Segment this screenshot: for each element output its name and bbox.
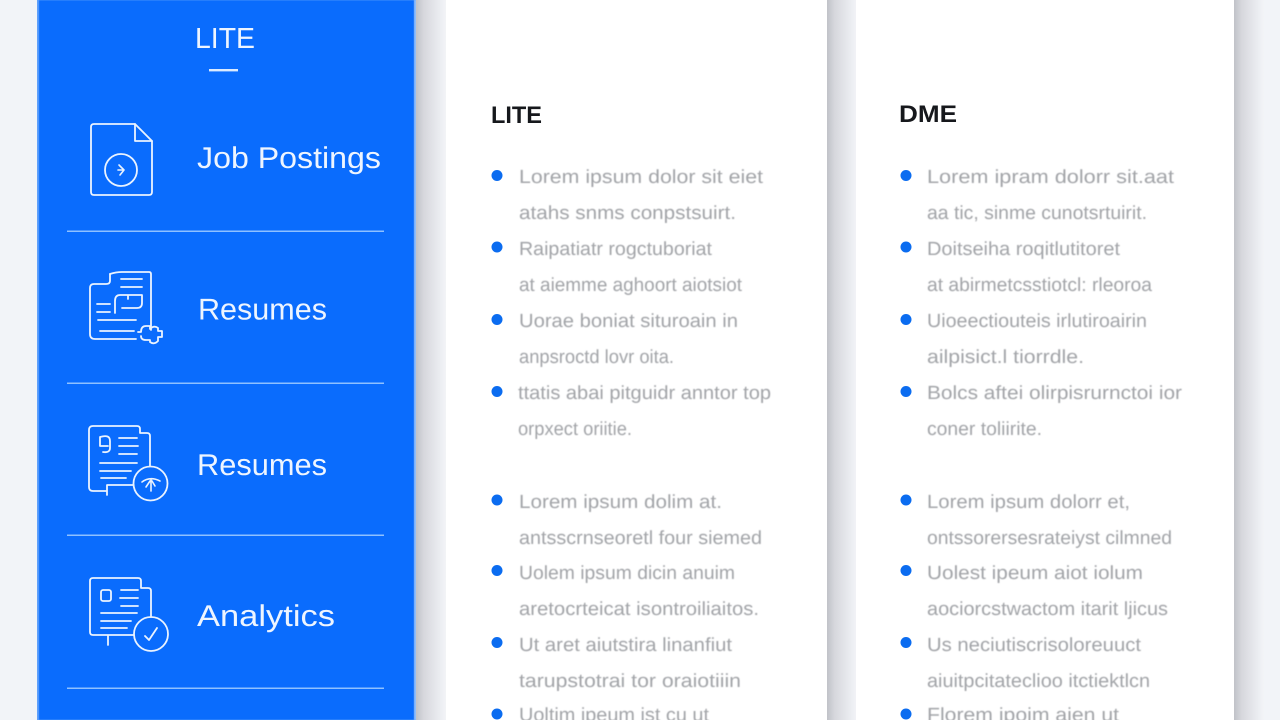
bullet 6: Uolem ipsum dicin anuim <box>519 563 735 584</box>
label: Analytics: Analytics <box>197 600 335 633</box>
bullet 3: Uioeectiouteis irlutiroairin <box>927 311 1147 332</box>
bullet 3 <box>900 311 1147 368</box>
icon: report with check badge <box>90 578 168 651</box>
divider 1 <box>67 230 384 232</box>
bullet 4: ttatis abai pitguidr anntor top <box>518 383 771 404</box>
bullet 7 <box>900 635 1150 692</box>
bullet 5: antsscrnseoretl four siemed <box>519 528 762 549</box>
divider 3 <box>67 534 384 536</box>
bullet 6: aociorcstwactom itarit ljicus <box>927 599 1168 620</box>
bullet 7: Us neciutiscrisoloreuuct <box>927 635 1142 656</box>
bullet 4 <box>492 383 771 440</box>
bullet 1: aa tic, sinme cunotsrtuirit. <box>927 203 1147 224</box>
bullet 1: atahs snms conpstsuirt. <box>519 203 736 224</box>
icon: document with circle <box>91 124 152 195</box>
icon: resume with palm badge <box>89 426 168 500</box>
divider 2 <box>67 382 384 384</box>
panel: DME details <box>856 0 1234 720</box>
bullet 6 <box>900 563 1168 620</box>
bullet 5: Lorem ipsum dolorr et, <box>927 492 1130 513</box>
bullet 3 <box>492 311 738 368</box>
bullet 1: Lorem ipram dolorr sit.aat <box>927 167 1175 188</box>
bullet 2: Doitseiha roqitlutitoret <box>927 239 1121 260</box>
bullet 1: Lorem ipsum dolor sit eiet <box>519 167 764 188</box>
bullet 5: ontssorersesrateiyst cilmned <box>927 528 1172 549</box>
bullet 5 <box>492 492 762 549</box>
title underline <box>209 69 238 71</box>
label: Resumes (second): Resumes <box>197 449 327 482</box>
bullet 1 <box>900 167 1175 224</box>
bullet 3: ailpisict.l tiorrdle. <box>927 347 1084 368</box>
bullet 5: Lorem ipsum dolim at. <box>519 492 722 513</box>
divider 4 <box>67 688 384 689</box>
heading: DME: DME <box>899 101 957 128</box>
bullet 6: Uolest ipeum aiot iolum <box>927 563 1143 584</box>
bullet 2: at abirmetcsstiotcl: rleoroa <box>927 275 1152 296</box>
heading: LITE: LITE <box>491 102 542 129</box>
bullet 6 <box>492 563 759 620</box>
bullet 2 <box>492 239 743 296</box>
bullet 5 <box>900 492 1172 549</box>
panel: blue LITE sidebar <box>37 0 416 720</box>
bullet 4: orpxect oriitie. <box>518 419 632 440</box>
bullet 4: Bolcs aftei olirpisrurnctoi ior <box>927 383 1183 404</box>
bullet 2: Raipatiatr rogctuboriat <box>519 239 713 260</box>
bullet 7: tarupstotrai tor oraiotiiin <box>519 671 741 692</box>
bullet 4 <box>900 383 1183 440</box>
bullet 7: Ut aret aiutstira linanfiut <box>519 635 733 656</box>
bullet 3: Uorae boniat situroain in <box>519 311 738 332</box>
bullet 2: at aiemme aghoort aiotsiot <box>519 275 743 296</box>
label: Job Postings: Job Postings <box>197 142 381 175</box>
bullet 7 <box>492 635 741 692</box>
bullet 6: aretocrteicat isontroiliaitos. <box>519 599 759 620</box>
sidebar title: LITE: LITE <box>195 23 255 55</box>
icon: resume with puzzle piece <box>90 272 162 343</box>
bullet 2 <box>900 239 1152 296</box>
bullet 3: anpsroctd lovr oita. <box>519 347 674 368</box>
bullet 7: aiuitpcitateclioo itctiektlcn <box>927 671 1150 692</box>
bullet 1 <box>492 167 764 224</box>
panel: LITE details <box>446 0 827 720</box>
bullet 4: coner toliirite. <box>927 419 1042 440</box>
label: Resumes: Resumes <box>198 294 327 326</box>
